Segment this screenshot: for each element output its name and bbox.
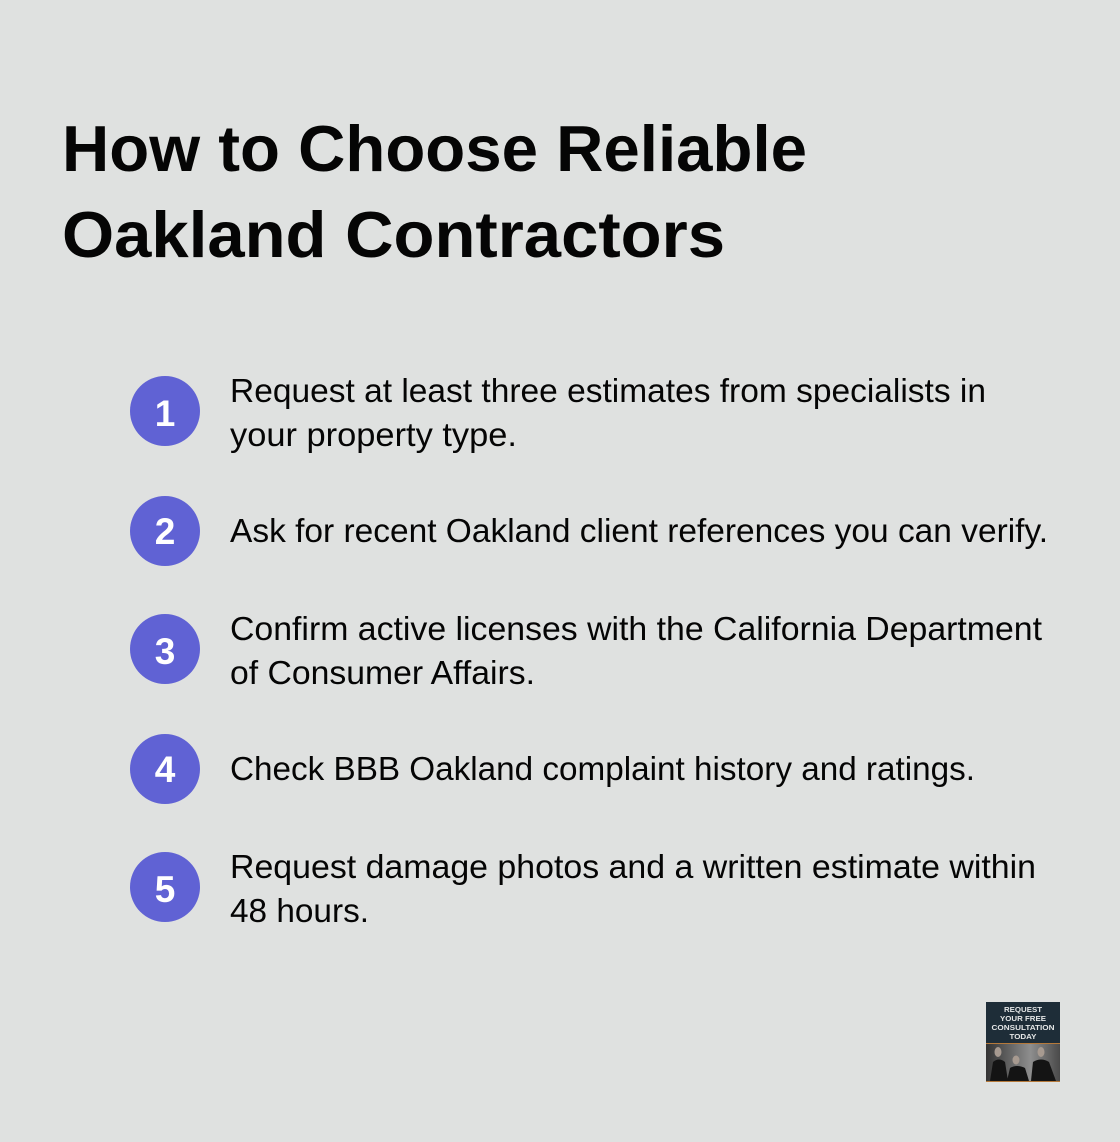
step 1 (130, 372, 986, 453)
step 5: 5 (155, 869, 175, 910)
step 2 (130, 496, 1048, 566)
step 3: Confirm active licenses with the California Department (230, 610, 1042, 647)
consultation badge: TODAY (1010, 1032, 1036, 1041)
step 5 (130, 848, 1036, 929)
step 5: 48 hours. (230, 892, 369, 929)
step 2: Ask for recent Oakland client references you can verify. (230, 512, 1048, 549)
step 4: Check BBB Oakland complaint history and ratings. (230, 750, 975, 787)
consultation badge: CONSULTATION (992, 1023, 1054, 1032)
title: Oakland Contractors (62, 198, 725, 271)
consultation badge (986, 1002, 1060, 1082)
consultation badge: YOUR FREE (1000, 1014, 1046, 1023)
step 2: 2 (155, 511, 175, 552)
title (62, 112, 807, 271)
step 3: of Consumer Affairs. (230, 654, 535, 691)
step 3: 3 (155, 631, 175, 672)
title: How to Choose Reliable (62, 112, 807, 185)
step 4: 4 (155, 749, 176, 790)
step 5: Request damage photos and a written estimate within (230, 848, 1036, 885)
step 3 (130, 610, 1042, 691)
step 4 (130, 734, 975, 804)
step 1: Request at least three estimates from specialists in (230, 372, 986, 409)
step 1: your property type. (230, 416, 517, 453)
consultation badge: REQUEST (1004, 1005, 1042, 1014)
step 1: 1 (155, 393, 175, 434)
